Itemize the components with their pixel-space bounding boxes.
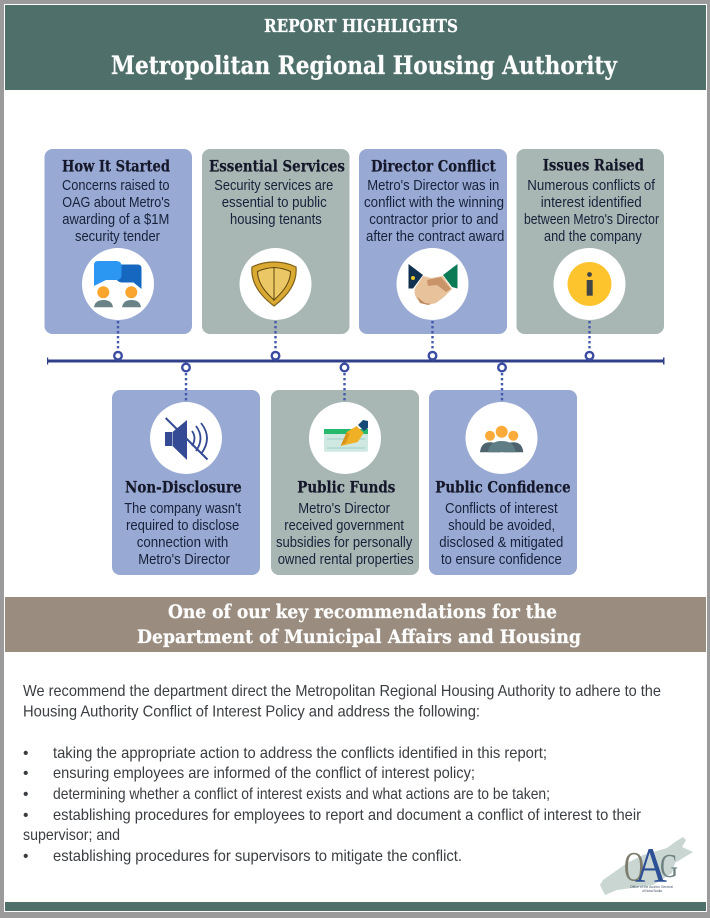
- connector: [498, 364, 506, 402]
- panel: Non-Disclosure: [112, 364, 260, 575]
- recommendation text: •: [23, 807, 28, 824]
- recommendation text: supervisor; and: [23, 827, 120, 844]
- recommendation text: establishing procedures for employees to report and document a conflict of interest to their: [53, 807, 641, 824]
- text block: received government: [284, 517, 405, 534]
- recommendation text: [23, 683, 661, 865]
- text block: conflict with the winning: [364, 194, 504, 211]
- panel: How It Started: [44, 149, 192, 360]
- icon: group of people: [466, 402, 538, 474]
- recommendation text: taking the appropriate action to address the conflicts identified in this report;: [53, 745, 547, 762]
- panel: Issues Raised: [516, 149, 664, 360]
- icon: shield: [240, 248, 312, 320]
- recommendation text: determining whether a conflict of interest exists and what actions are to be taken;: [53, 786, 550, 803]
- recommendation banner: Department of Municipal Affairs and Housing: [137, 626, 581, 648]
- logo: Office of the Auditor General: O: [624, 845, 644, 891]
- connector: [429, 321, 436, 360]
- recommendation text: ensuring employees are informed of the conflict of interest policy;: [53, 765, 475, 782]
- header banner: [5, 5, 706, 90]
- text block: OAG about Metro's: [62, 194, 170, 211]
- panel: Essential Services: [202, 149, 350, 360]
- text block: subsidies for personally: [276, 534, 413, 551]
- icon: muted speaker: [150, 402, 222, 474]
- text block: [214, 177, 333, 228]
- text block: essential to public: [222, 194, 327, 211]
- text block: [276, 500, 414, 568]
- connector: [114, 321, 122, 360]
- heading: Director Conflict: [371, 156, 496, 176]
- connector: [182, 364, 190, 402]
- timeline axis: [47, 358, 664, 364]
- logo: Office of the Auditor General: of Nova Scotia: [642, 889, 662, 893]
- icon: discussion: [82, 248, 154, 320]
- text block: [364, 177, 504, 245]
- heading: Public Confidence: [435, 478, 571, 496]
- text block: Metro's Director was in: [367, 177, 499, 194]
- title: Metropolitan Regional Housing Authority: [111, 51, 618, 81]
- text block: [62, 177, 170, 245]
- heading: Non-Disclosure: [125, 478, 242, 496]
- connector: [341, 364, 348, 402]
- text block: disclosed & mitigated: [439, 534, 563, 551]
- logo: Office of the Auditor General: Office of the Auditor General: [630, 885, 673, 889]
- recommendation banner: [5, 597, 706, 652]
- text block: Concerns raised to: [62, 177, 170, 194]
- text block: Security services are: [214, 177, 333, 194]
- recommendation text: •: [23, 848, 28, 865]
- text block: should be avoided,: [448, 517, 555, 534]
- recommendation text: Housing Authority Conflict of Interest Policy and address the following:: [23, 704, 480, 720]
- recommendation text: •: [23, 765, 28, 782]
- text block: Numerous conflicts of: [527, 177, 656, 194]
- text block: [124, 500, 242, 568]
- text block: to ensure confidence: [441, 551, 562, 568]
- text block: connection with: [137, 534, 228, 551]
- text block: Metro's Director: [298, 500, 390, 517]
- panel: Public Funds: [271, 364, 419, 575]
- text block: and the company: [544, 228, 642, 245]
- text block: contractor prior to and: [369, 211, 498, 228]
- heading: Issues Raised: [543, 156, 644, 174]
- text block: after the contract award: [366, 228, 504, 245]
- logo: Office of the Auditor General: A: [635, 837, 667, 893]
- connector: [586, 321, 593, 360]
- heading: Public Funds: [297, 478, 395, 496]
- header kicker: REPORT HIGHLIGHTS: [264, 17, 458, 37]
- logo: Office of the Auditor General: G: [660, 848, 678, 885]
- icon: handshake: [396, 248, 468, 320]
- recommendation text: •: [23, 786, 28, 803]
- heading: Essential Services: [209, 156, 345, 176]
- text block: interest identified: [541, 194, 642, 211]
- connector: [272, 321, 279, 360]
- text block: Metro's Director: [138, 551, 230, 568]
- panel: Public Confidence: [429, 364, 577, 575]
- panel: Director Conflict: [359, 149, 507, 360]
- text block: [439, 500, 563, 568]
- logo: Office of the Auditor General: [600, 837, 693, 895]
- footer bar: [5, 902, 706, 911]
- text block: awarding of a $1M: [62, 211, 169, 228]
- recommendation text: •: [23, 745, 28, 762]
- text block: owned rental properties: [278, 551, 414, 568]
- text block: required to disclose: [126, 517, 239, 534]
- text block: security tender: [75, 228, 160, 245]
- recommendation text: establishing procedures for supervisors to mitigate the conflict.: [53, 848, 462, 865]
- heading: How It Started: [62, 156, 170, 176]
- text block: housing tenants: [230, 211, 322, 228]
- text block: [524, 177, 659, 245]
- text block: Conflicts of interest: [445, 500, 558, 517]
- icon: information: [554, 248, 626, 320]
- recommendation text: We recommend the department direct the Metropolitan Regional Housing Authority to adhere to the: [23, 683, 661, 700]
- icon: cheque and pen: [309, 402, 381, 474]
- text block: The company wasn't: [124, 500, 242, 517]
- text block: between Metro's Director: [524, 211, 659, 228]
- recommendation banner: One of our key recommendations for the: [168, 601, 557, 623]
